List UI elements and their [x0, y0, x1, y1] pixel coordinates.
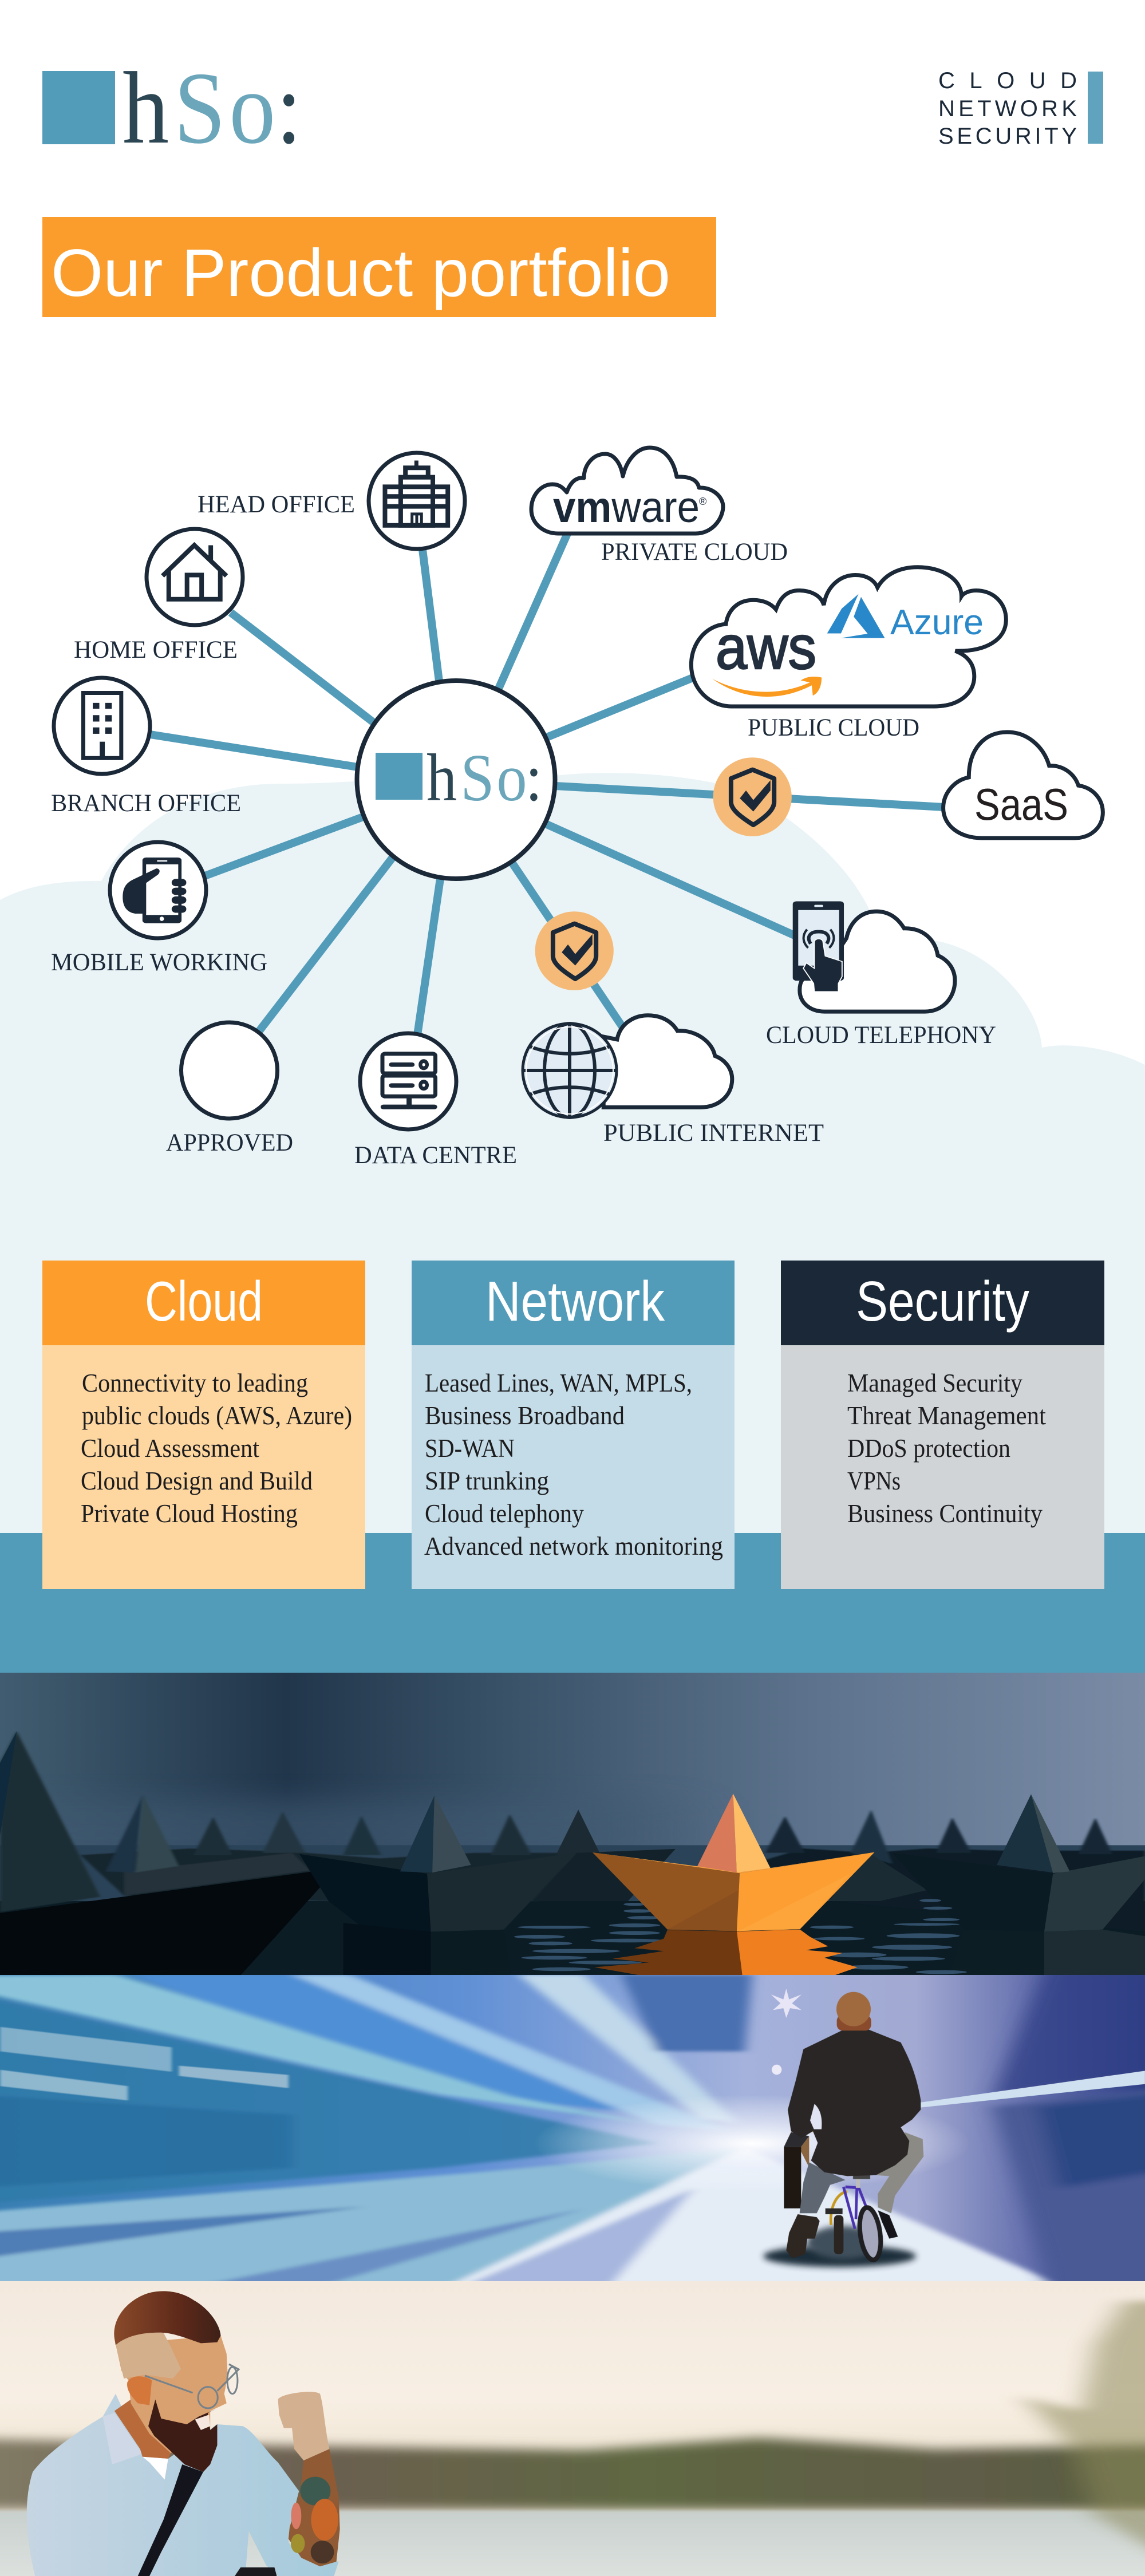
- label: mobile working: MOBILE WORKING: [51, 949, 267, 976]
- label: cloud telephony: CLOUD TELEPHONY: [766, 1022, 996, 1049]
- shirt: [27, 2394, 339, 2576]
- node: data centre: [360, 1033, 456, 1129]
- list: cloud services: Private Cloud Hosting: [81, 1499, 298, 1528]
- list: security services: Threat Management: [847, 1401, 1046, 1430]
- label: head office: HEAD OFFICE: [198, 491, 355, 518]
- heading: network: Network: [485, 1270, 665, 1333]
- label: public internet: PUBLIC INTERNET: [603, 1120, 824, 1147]
- list: cloud services: Cloud Assessment: [81, 1434, 259, 1463]
- briefcase: [784, 2132, 809, 2147]
- node: home office: [147, 529, 243, 625]
- list: security services: Managed Security: [847, 1369, 1022, 1397]
- glasses: [145, 2364, 239, 2408]
- node: private cloud vmware: vmware: [553, 483, 700, 532]
- star flare: [771, 1989, 802, 2018]
- list: network services: Advanced network monitoring: [424, 1532, 723, 1560]
- list: cloud services: [81, 1369, 352, 1528]
- illustration: paper boats: [0, 1673, 1145, 1975]
- left dark boats: [124, 1853, 310, 1895]
- right dark boat: [924, 1888, 927, 1890]
- label: branch office: BRANCH OFFICE: [51, 790, 241, 817]
- network connector lines: [150, 532, 945, 1035]
- label: approved: APPROVED: [166, 1129, 293, 1156]
- middle dark boat: [299, 1854, 429, 1902]
- panel: cloud: [42, 1261, 365, 1589]
- list: network services: Business Broadband: [425, 1401, 625, 1430]
- node: cloud telephony: [793, 901, 955, 1012]
- icon: house: [163, 545, 227, 599]
- tagline: cloud network security: CLOUD: [938, 68, 1077, 93]
- label: home office: HOME OFFICE: [74, 637, 238, 663]
- icon: aws smile: [712, 677, 822, 697]
- background: pale cloud shape: [0, 773, 1145, 1546]
- central hub: hSo logo: hSo:: [427, 741, 542, 815]
- background: teal band: [0, 1533, 1145, 1673]
- beard: [148, 2400, 217, 2472]
- list: security services: Business Continuity: [847, 1499, 1043, 1528]
- icon: hand holding phone: [123, 858, 186, 923]
- node: public cloud aws azure: aws: [716, 613, 816, 682]
- list: network services: Cloud telephony: [425, 1499, 584, 1528]
- list: cloud services: Connectivity to leading: [82, 1369, 308, 1397]
- water ripples: [514, 1899, 967, 1974]
- logo: hSo: [42, 51, 302, 165]
- illustration: happy man with tattoo in front of lake: [0, 2281, 1145, 2576]
- list: security services: DDoS protection: [847, 1434, 1010, 1463]
- tagline: cloud network security: SECURITY: [938, 124, 1077, 149]
- illustration: businessman on small bike in light tunnel: [0, 1970, 1145, 2290]
- man with raised fist: [27, 2291, 340, 2576]
- strap: [138, 2464, 203, 2576]
- bike: [812, 2128, 883, 2261]
- node: public cloud aws azure: [691, 567, 1006, 706]
- icon: office block: [83, 693, 121, 758]
- icon: server: [381, 1054, 437, 1109]
- list: network services: Leased Lines, WAN, MPLS,: [425, 1369, 692, 1397]
- ear: [127, 2376, 152, 2405]
- icon: tall office building: [385, 461, 448, 526]
- neck and face: [114, 2400, 173, 2459]
- logo: hSo: hSo:: [123, 51, 302, 165]
- node: mobile working: [110, 842, 206, 938]
- icon: azure logo: [827, 594, 885, 638]
- orange paper boat: [593, 1793, 874, 1931]
- label: public cloud: PUBLIC CLOUD: [748, 714, 919, 741]
- icon: security shield on internet link: [535, 911, 614, 990]
- node: public internet: [523, 1016, 732, 1117]
- list: network services: SIP trunking: [425, 1467, 549, 1495]
- list: security services: [847, 1369, 1046, 1528]
- jacket: [788, 2026, 921, 2176]
- icon: security shield on saas link: [713, 757, 792, 836]
- trousers and shoes: [800, 2163, 846, 2213]
- node: saas: SaaS: [974, 779, 1068, 829]
- man on bike: [763, 1989, 923, 2267]
- list: network services: SD-WAN: [425, 1434, 515, 1463]
- label: data centre: DATA CENTRE: [354, 1142, 517, 1169]
- list: cloud services: public clouds (AWS, Azure): [82, 1401, 352, 1430]
- icon: globe: [523, 1024, 617, 1117]
- central hub: hSo logo: [357, 681, 555, 879]
- list: network services: [424, 1369, 723, 1560]
- heading: security: Security: [856, 1270, 1029, 1333]
- heading: cloud: Cloud: [145, 1270, 263, 1333]
- node: private cloud vmware: [531, 448, 723, 534]
- node: head office: [369, 453, 465, 549]
- list: security services: VPNs: [847, 1467, 901, 1495]
- tattooed forearm: [289, 2449, 340, 2566]
- node: saas: [943, 732, 1103, 838]
- title: our product portfolio: Our Product portfolio: [51, 235, 670, 310]
- panel: security: [781, 1261, 1104, 1589]
- title: our product portfolio: [42, 217, 716, 317]
- node: public cloud aws azure: Azure: [890, 603, 984, 642]
- node: branch office: [54, 678, 150, 774]
- label: private cloud: PRIVATE CLOUD: [601, 539, 788, 566]
- hair: [114, 2291, 221, 2345]
- node: approved (empty circle): [181, 1022, 277, 1119]
- phone: [235, 2567, 277, 2576]
- head: [837, 2015, 871, 2030]
- panel: network: [412, 1261, 735, 1589]
- raised fist: [278, 2392, 329, 2460]
- node: private cloud vmware: ®: [699, 496, 706, 507]
- tagline: cloud network security: NETWORK: [938, 96, 1077, 121]
- list: cloud services: Cloud Design and Build: [81, 1467, 313, 1495]
- reflection of orange boat: [594, 1930, 743, 1975]
- tagline: cloud network security: [938, 68, 1103, 149]
- icon: phone with touch hand: [793, 901, 844, 991]
